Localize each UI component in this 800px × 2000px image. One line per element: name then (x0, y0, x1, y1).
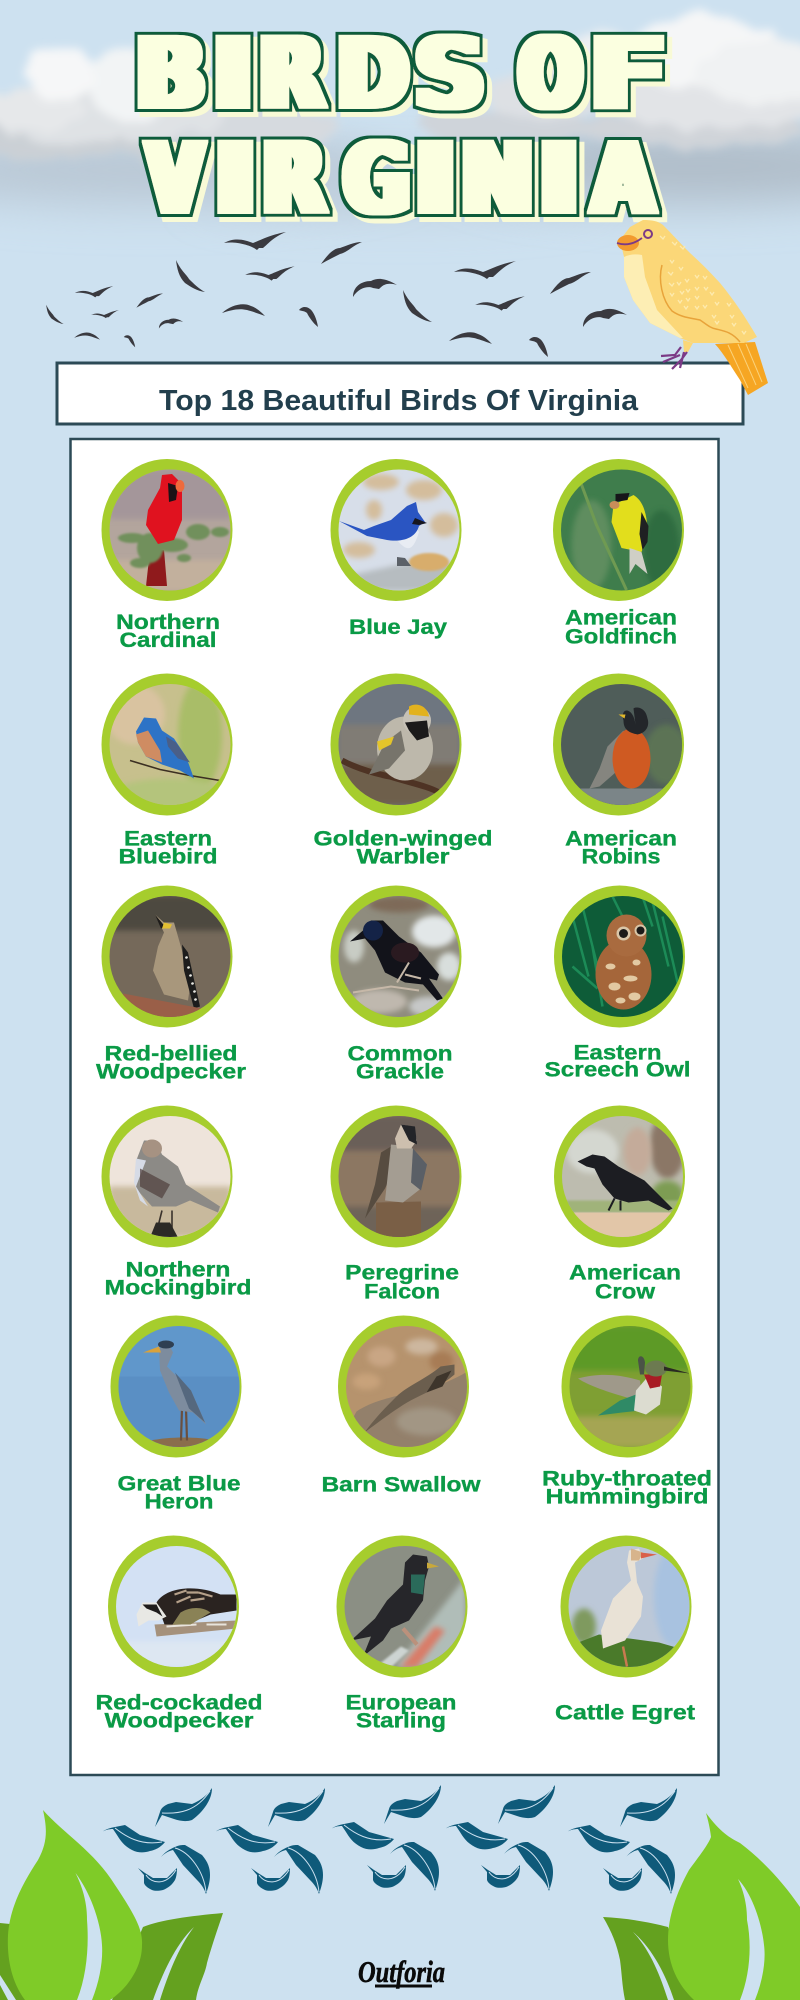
label (346, 1692, 456, 1732)
Outforia logo: Outforia (358, 1954, 445, 1989)
label: Common (348, 1042, 452, 1066)
card: Peregrine Falcon (330, 1106, 464, 1304)
label: Robins (582, 846, 660, 868)
label: Screech Owl (544, 1058, 690, 1082)
legs (683, 340, 693, 352)
card: Golden-winged Warbler (314, 674, 492, 868)
title: R (263, 122, 325, 237)
title: I (213, 122, 258, 237)
label (544, 1042, 690, 1082)
flock of flying birds (46, 232, 627, 357)
card: Northern Cardinal (102, 459, 235, 652)
label (348, 1042, 452, 1084)
falling feathers row (102, 1785, 677, 1894)
label: American (565, 828, 677, 850)
card: Red-cockaded Woodpecker (96, 1536, 262, 1732)
label: Crow (595, 1280, 656, 1304)
label: Goldfinch (565, 626, 677, 648)
title (136, 17, 667, 237)
icon: yellow perched bird (617, 220, 768, 395)
label: Bluebird (118, 846, 218, 868)
title: O (519, 17, 582, 132)
title: S (415, 17, 485, 132)
label: Mockingbird (104, 1276, 252, 1300)
label: Red-cockaded (96, 1692, 262, 1714)
label: Ruby-throated (542, 1468, 712, 1490)
card: Barn Swallow (322, 1316, 481, 1496)
label: Falcon (364, 1280, 440, 1304)
label: Eastern (574, 1042, 662, 1064)
label: European (346, 1692, 456, 1714)
label (104, 1258, 252, 1300)
label: Grackle (356, 1060, 444, 1084)
card: Ruby-throated Hummingbird (542, 1316, 712, 1508)
subtitle box: Top 18 Beautiful Birds Of Virginia (159, 385, 639, 417)
title: I (211, 17, 255, 132)
label: Warbler (356, 846, 450, 868)
label: Heron (144, 1490, 214, 1514)
title: A (593, 122, 653, 237)
label: Golden-winged (314, 828, 492, 850)
label: Northern (116, 611, 220, 634)
tail (715, 342, 768, 395)
label (314, 828, 492, 868)
label (96, 1042, 246, 1084)
label: Peregrine (345, 1262, 459, 1284)
label (565, 828, 677, 868)
title: N (461, 122, 533, 237)
card: Cattle Egret (555, 1536, 695, 1724)
leaves bottom right (603, 1813, 800, 2000)
main white panel (70, 439, 718, 1775)
label (118, 1472, 240, 1514)
card: Red-bellied Woodpecker (96, 886, 246, 1084)
card: American Goldfinch (553, 459, 686, 648)
label (569, 1262, 681, 1304)
label: Woodpecker (96, 1060, 246, 1084)
label (345, 1262, 459, 1304)
label: Great Blue (118, 1472, 240, 1496)
title: B (136, 17, 206, 132)
card: Common Grackle (330, 886, 464, 1084)
label (542, 1468, 712, 1508)
label: Woodpecker (104, 1710, 254, 1732)
card: Blue Jay (330, 459, 464, 639)
card: American Crow (554, 1106, 688, 1304)
title: F (590, 17, 667, 132)
label: Red-bellied (104, 1042, 238, 1066)
title: I (413, 122, 458, 237)
label (116, 611, 220, 652)
label: Starling (356, 1710, 446, 1732)
label: Blue Jay (349, 616, 447, 639)
title: R (259, 17, 324, 132)
card: Northern Mockingbird (102, 1106, 252, 1300)
card: Great Blue Heron (110, 1316, 244, 1514)
label: Hummingbird (546, 1486, 708, 1508)
label: American (569, 1262, 681, 1284)
label: Cardinal (120, 629, 216, 652)
leaves bottom left (0, 1810, 223, 2000)
label (565, 606, 677, 648)
subtitle box (57, 363, 743, 424)
title: V (148, 122, 203, 237)
label (96, 1692, 262, 1732)
clouds (0, 14, 800, 212)
feather marks (660, 236, 746, 334)
label: Northern (126, 1258, 230, 1282)
beak and eye (617, 235, 639, 251)
label: Barn Swallow (322, 1474, 481, 1496)
card: European Starling (336, 1536, 470, 1732)
title: I (537, 122, 581, 237)
title: D (337, 17, 408, 132)
card: American Robins (553, 674, 688, 868)
label: American (565, 606, 677, 630)
title: G (344, 122, 409, 237)
label: Eastern (124, 828, 212, 850)
body (620, 220, 757, 343)
card: Eastern Bluebird (102, 674, 235, 868)
wing line (660, 265, 740, 342)
card: Eastern Screech Owl (544, 886, 690, 1082)
label: Cattle Egret (555, 1702, 695, 1724)
label (118, 828, 218, 868)
belly (624, 254, 683, 338)
